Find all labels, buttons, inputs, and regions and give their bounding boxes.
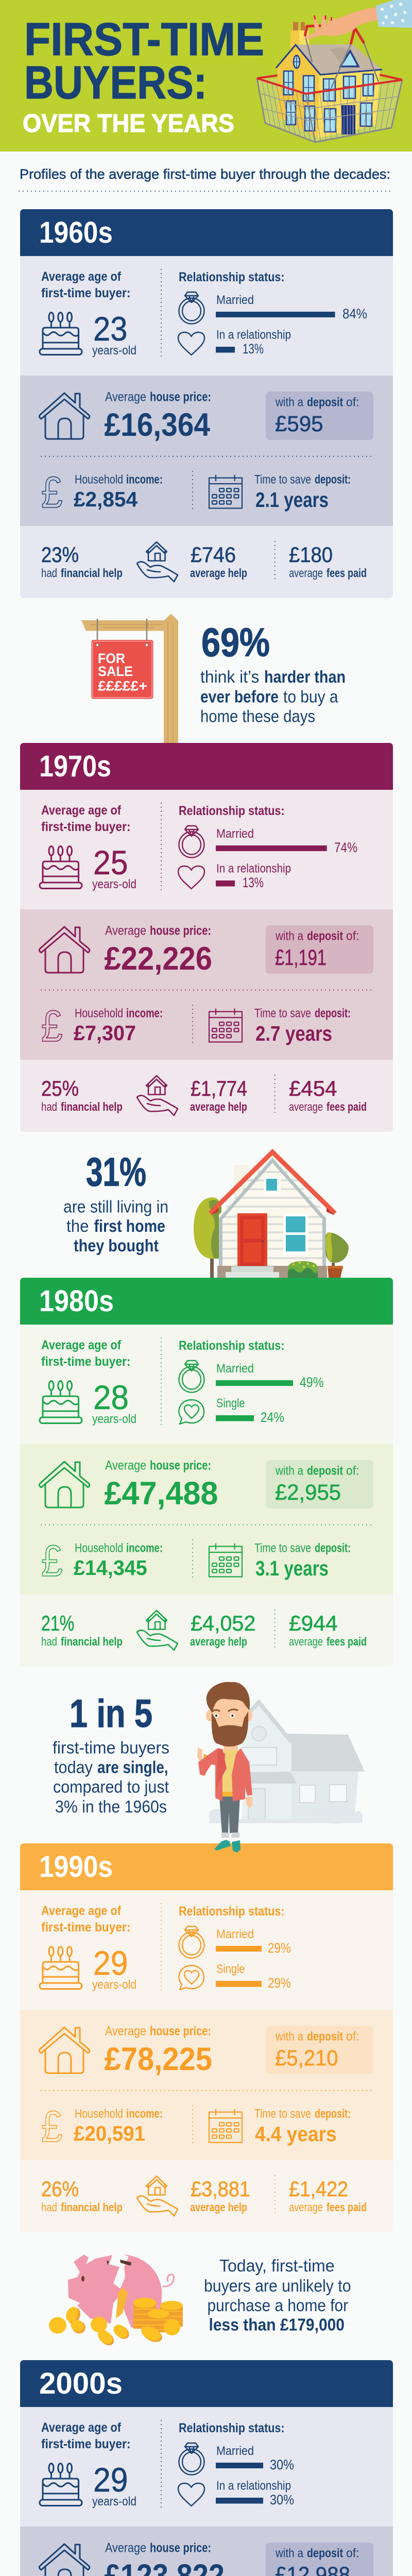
average fees stat: fees paid bbox=[327, 1100, 367, 1113]
average house price: Average bbox=[105, 2024, 146, 2038]
time to save deposit bbox=[209, 1541, 351, 1580]
relationship status chart: In a relationship bbox=[216, 2479, 291, 2493]
callout: 31% still living in first home: the bbox=[66, 1216, 89, 1235]
header banner bbox=[0, 0, 412, 151]
relationship status chart bbox=[179, 1904, 291, 1991]
average house price: £16,364 bbox=[104, 407, 210, 443]
average age block: first-time buyer: bbox=[41, 2437, 131, 2451]
time to save deposit bbox=[209, 473, 351, 512]
average age block bbox=[40, 269, 136, 358]
decade heading: 2000s bbox=[39, 2367, 123, 2400]
average age block: Average age of bbox=[41, 2420, 122, 2435]
average house price: house price: bbox=[150, 923, 211, 938]
deposit box: of: bbox=[346, 929, 359, 943]
callout: 69% harder than ever: think it’s bbox=[200, 667, 260, 686]
household income: £7,307 bbox=[74, 1021, 136, 1045]
time to save deposit: deposit: bbox=[315, 473, 351, 486]
relationship status chart: 84% bbox=[342, 306, 367, 321]
average age block: 23 bbox=[93, 310, 128, 348]
average house price: house price: bbox=[150, 2024, 211, 2038]
relationship status chart bbox=[179, 1338, 324, 1425]
relationship status chart: Married bbox=[216, 1927, 254, 1941]
callout: 69% harder than ever: 69% bbox=[201, 619, 270, 665]
callout: buyers purchase below 179,000: buyers are unlikely to bbox=[204, 2276, 351, 2295]
time to save deposit: deposit: bbox=[315, 1541, 351, 1555]
financial help stat: financial help bbox=[61, 566, 123, 580]
average age block: Average age of bbox=[41, 1338, 122, 1352]
relationship status chart: Married bbox=[216, 293, 254, 307]
title: first-time buyers: FIRST-TIME bbox=[24, 14, 264, 65]
household income: income: bbox=[126, 473, 163, 486]
average house price bbox=[39, 1458, 218, 1512]
relationship status chart bbox=[178, 270, 367, 357]
household income: Household bbox=[75, 2107, 123, 2121]
relationship status chart: Relationship status: bbox=[179, 1338, 284, 1353]
time to save deposit: Time to save bbox=[254, 1541, 311, 1555]
average age block: 28 bbox=[93, 1378, 129, 1416]
deposit box: with a bbox=[275, 929, 304, 943]
relationship status chart: Single bbox=[216, 1396, 245, 1411]
household income: £14,345 bbox=[74, 1556, 147, 1580]
callout: 31% still living in first home: 31% bbox=[86, 1149, 146, 1194]
financial help stat bbox=[41, 2177, 123, 2214]
average age block: Average age of bbox=[41, 803, 122, 818]
average fees stat: fees paid bbox=[327, 1635, 367, 1648]
average help stat: £1,774 bbox=[191, 1076, 247, 1100]
average age block bbox=[40, 1338, 136, 1426]
average help stat bbox=[137, 2176, 250, 2216]
household income: income: bbox=[126, 1007, 163, 1020]
illustration: faded house behind buyer bbox=[209, 1702, 365, 1824]
panel: 1980s bbox=[20, 1278, 393, 1667]
panel: 1970s bbox=[20, 743, 393, 1132]
callout: 1 in 5 are single: 3% in the 1960s bbox=[55, 1797, 167, 1816]
average house price: £22,226 bbox=[104, 941, 212, 977]
relationship status chart: 30% bbox=[270, 2492, 294, 2507]
relationship status chart: Married bbox=[216, 1362, 254, 1376]
average fees stat bbox=[289, 543, 367, 580]
average fees stat: average bbox=[289, 566, 323, 580]
deposit box: deposit bbox=[307, 929, 343, 943]
title: first-time buyers bbox=[24, 14, 264, 109]
average house price: £78,225 bbox=[104, 2041, 212, 2077]
financial help stat: had bbox=[41, 1100, 57, 1113]
deposit box: deposit bbox=[307, 2546, 343, 2561]
deposit box: £595 bbox=[275, 412, 323, 436]
relationship status chart: 49% bbox=[300, 1375, 324, 1390]
average house price: Average bbox=[105, 389, 146, 404]
intro heading: Profiles of the average first-time buyer through the decades: bbox=[20, 166, 390, 182]
average house price: house price: bbox=[150, 1458, 211, 1472]
average house price: house price: bbox=[150, 2541, 211, 2555]
average age block bbox=[40, 2420, 136, 2509]
household income bbox=[41, 2103, 163, 2151]
deposit box bbox=[266, 1460, 373, 1509]
average fees stat: £944 bbox=[289, 1611, 338, 1635]
average fees stat: fees paid bbox=[327, 566, 367, 580]
panel: 1960s bbox=[20, 209, 393, 598]
average help stat: average help bbox=[190, 1635, 247, 1648]
relationship status chart: 13% bbox=[243, 341, 264, 357]
average fees stat: average bbox=[289, 1635, 323, 1648]
financial help stat: 25% bbox=[41, 1076, 79, 1100]
time to save deposit: Time to save bbox=[254, 1007, 311, 1020]
average fees stat: average bbox=[289, 1100, 323, 1113]
subtitle: over the years: OVER THE YEARS bbox=[23, 110, 234, 138]
callout: 31% still living in first home bbox=[63, 1149, 168, 1255]
callout: 69% harder than ever: to buy a bbox=[283, 687, 338, 706]
financial help stat bbox=[41, 1611, 123, 1648]
deposit box: deposit bbox=[307, 2030, 343, 2043]
callout: 1 in 5 are single: are single, bbox=[97, 1758, 168, 1776]
callout: 1 in 5 are single: today bbox=[54, 1758, 93, 1776]
average fees stat bbox=[289, 1611, 367, 1648]
average house price bbox=[39, 2541, 225, 2576]
deposit box: with a bbox=[275, 1464, 304, 1478]
relationship status chart: Married bbox=[216, 2444, 254, 2458]
household income bbox=[41, 1537, 163, 1586]
average house price: Average bbox=[105, 1458, 146, 1472]
deposit box bbox=[266, 2026, 373, 2074]
callout: 69% harder than ever: harder than bbox=[264, 667, 346, 686]
average help stat bbox=[137, 542, 247, 582]
financial help stat: 23% bbox=[41, 543, 79, 567]
financial help stat bbox=[41, 1076, 123, 1113]
average age block: years-old bbox=[92, 1412, 136, 1426]
financial help stat: financial help bbox=[61, 1100, 123, 1113]
relationship status chart: 29% bbox=[268, 1940, 291, 1956]
time to save deposit: deposit: bbox=[315, 2107, 351, 2121]
callout: 69% harder than ever: ever before bbox=[200, 687, 279, 706]
average age block: years-old bbox=[92, 877, 136, 891]
callout: 69% harder than ever: home these days bbox=[200, 707, 315, 725]
callout: 31% still living in first home: first home bbox=[94, 1216, 165, 1235]
relationship status chart: 29% bbox=[268, 1975, 291, 1991]
household income: Household bbox=[75, 1541, 123, 1555]
average age block: first-time buyer: bbox=[41, 1354, 131, 1369]
financial help stat: had bbox=[41, 1635, 57, 1648]
financial help stat: financial help bbox=[61, 2200, 123, 2214]
average help stat bbox=[137, 1611, 255, 1650]
callout: buyers purchase below 179,000: purchase a home for bbox=[207, 2296, 348, 2315]
average age block: Average age of bbox=[41, 1904, 122, 1918]
average age block: first-time buyer: bbox=[41, 286, 131, 300]
callout: 1 in 5 are single bbox=[53, 1692, 169, 1816]
average help stat: £4,052 bbox=[191, 1611, 255, 1635]
deposit box bbox=[266, 925, 373, 974]
household income bbox=[41, 1002, 163, 1051]
callout: 1 in 5 are single: 1 in 5 bbox=[70, 1692, 152, 1736]
relationship status chart: In a relationship bbox=[216, 861, 291, 876]
deposit box: of: bbox=[346, 2030, 359, 2043]
average help stat: average help bbox=[190, 1100, 247, 1113]
callout: 1 in 5 are single: compared to just bbox=[53, 1777, 169, 1796]
deposit box: deposit bbox=[307, 396, 343, 409]
illustration: for sale sign bbox=[81, 614, 178, 743]
relationship status chart: 30% bbox=[270, 2457, 294, 2472]
average help stat: average help bbox=[190, 2200, 247, 2214]
illustration: for sale sign: FOR bbox=[98, 651, 125, 666]
average age block: first-time buyer: bbox=[41, 1920, 131, 1935]
illustration: house in a shopping basket held by a hand bbox=[257, 0, 412, 142]
illustration: bearded buyer holding key bbox=[197, 1682, 252, 1853]
average age block: years-old bbox=[92, 2495, 136, 2509]
decade heading: 1960s bbox=[39, 216, 113, 249]
relationship status chart: Relationship status: bbox=[179, 1904, 284, 1919]
deposit box: £5,210 bbox=[275, 2046, 338, 2071]
time to save deposit bbox=[209, 2107, 351, 2146]
average age block: years-old bbox=[92, 344, 136, 358]
deposit box: £1,191 bbox=[275, 945, 327, 970]
illustration: first home house bbox=[194, 1152, 349, 1278]
average fees stat: £454 bbox=[289, 1076, 337, 1100]
average help stat: £3,881 bbox=[191, 2177, 250, 2201]
average age block: Average age of bbox=[41, 269, 122, 284]
household income: Household bbox=[75, 1007, 123, 1020]
callout: buyers purchase below 179,000: Today, first-time bbox=[219, 2256, 335, 2275]
household income: £ bbox=[41, 468, 63, 517]
callout: 31% still living in first home: are still living in bbox=[63, 1197, 168, 1216]
average house price bbox=[39, 923, 212, 977]
callout: 69% harder than ever bbox=[200, 619, 346, 725]
average fees stat: fees paid bbox=[327, 2200, 367, 2214]
deposit box: of: bbox=[346, 396, 359, 409]
illustration: broken piggy bank with coins bbox=[49, 2255, 183, 2348]
deposit box: with a bbox=[275, 396, 304, 409]
average age block: 29 bbox=[93, 1944, 128, 1982]
callout: buyers purchase below 179,000 bbox=[204, 2256, 351, 2334]
average fees stat: £180 bbox=[289, 543, 333, 567]
average house price: £47,488 bbox=[104, 1476, 218, 1512]
callout: buyers purchase below 179,000: less than £179,000 bbox=[209, 2315, 345, 2334]
average fees stat: average bbox=[289, 2200, 323, 2214]
average age block bbox=[40, 803, 136, 891]
relationship status chart bbox=[178, 2421, 294, 2507]
illustration: for sale sign: SALE bbox=[98, 664, 133, 679]
deposit box: deposit bbox=[307, 1464, 343, 1478]
decade heading: 1980s bbox=[39, 1284, 114, 1318]
financial help stat: had bbox=[41, 2200, 57, 2214]
relationship status chart: Single bbox=[216, 1962, 245, 1976]
relationship status chart: In a relationship bbox=[216, 328, 291, 342]
decade heading: 1970s bbox=[39, 750, 111, 783]
relationship status chart: Relationship status: bbox=[179, 2421, 284, 2435]
average house price: Average bbox=[105, 2541, 146, 2555]
callout: 31% still living in first home: they bought bbox=[74, 1236, 159, 1255]
household income: £ bbox=[41, 1537, 63, 1586]
average age block: 29 bbox=[93, 2461, 128, 2499]
average house price bbox=[39, 389, 211, 443]
deposit box: of: bbox=[346, 2546, 359, 2561]
financial help stat: 21% bbox=[41, 1611, 74, 1635]
title: first-time buyers: BUYERS: bbox=[24, 57, 207, 109]
deposit box bbox=[266, 392, 373, 440]
time to save deposit: 2.7 years bbox=[255, 1022, 332, 1045]
financial help stat bbox=[41, 543, 123, 580]
average house price bbox=[39, 2024, 212, 2077]
panel: 2000s bbox=[20, 2360, 393, 2576]
average fees stat: £1,422 bbox=[289, 2177, 348, 2201]
relationship status chart: Relationship status: bbox=[179, 804, 284, 818]
household income: income: bbox=[126, 2107, 163, 2121]
household income: income: bbox=[126, 1541, 163, 1555]
time to save deposit: deposit: bbox=[315, 1007, 351, 1020]
average fees stat bbox=[289, 2177, 367, 2214]
average help stat: £746 bbox=[191, 543, 236, 567]
household income: Household bbox=[75, 473, 123, 486]
time to save deposit: 3.1 years bbox=[255, 1556, 329, 1580]
average help stat bbox=[137, 1076, 247, 1115]
relationship status chart: Married bbox=[216, 827, 254, 841]
household income: £2,854 bbox=[74, 487, 138, 511]
deposit box: with a bbox=[275, 2030, 304, 2043]
average help stat: average help bbox=[190, 566, 247, 580]
household income: £20,591 bbox=[74, 2122, 145, 2145]
callout: 1 in 5 are single: first-time buyers bbox=[53, 1738, 169, 1757]
deposit box: £2,955 bbox=[275, 1480, 341, 1505]
time to save deposit: Time to save bbox=[254, 473, 311, 486]
average age block: years-old bbox=[92, 1978, 136, 1992]
relationship status chart: 74% bbox=[334, 840, 357, 855]
relationship status chart bbox=[178, 804, 357, 890]
financial help stat: financial help bbox=[61, 1635, 123, 1648]
average house price: Average bbox=[105, 923, 146, 938]
relationship status chart: 13% bbox=[243, 875, 264, 890]
financial help stat: 26% bbox=[41, 2177, 79, 2201]
time to save deposit: 4.4 years bbox=[255, 2122, 337, 2146]
time to save deposit bbox=[209, 1007, 351, 1045]
household income: £ bbox=[41, 2103, 63, 2151]
relationship status chart: 24% bbox=[261, 1410, 284, 1425]
average age block bbox=[40, 1904, 136, 1992]
illustration: for sale sign: £££££+ bbox=[98, 678, 147, 693]
decade heading: 1990s bbox=[39, 1850, 113, 1884]
deposit box: with a bbox=[275, 2546, 304, 2561]
relationship status chart: Relationship status: bbox=[179, 270, 284, 284]
average age block: first-time buyer: bbox=[41, 820, 131, 834]
time to save deposit: 2.1 years bbox=[255, 488, 329, 512]
deposit box: of: bbox=[346, 1464, 359, 1478]
household income bbox=[41, 468, 163, 517]
average house price: house price: bbox=[150, 389, 211, 404]
financial help stat: had bbox=[41, 566, 57, 580]
panel: 1990s bbox=[20, 1843, 393, 2232]
household income: £ bbox=[41, 1002, 63, 1051]
average age block: 25 bbox=[93, 843, 128, 882]
deposit box bbox=[266, 2543, 373, 2576]
average fees stat bbox=[289, 1076, 367, 1113]
time to save deposit: Time to save bbox=[254, 2107, 311, 2121]
